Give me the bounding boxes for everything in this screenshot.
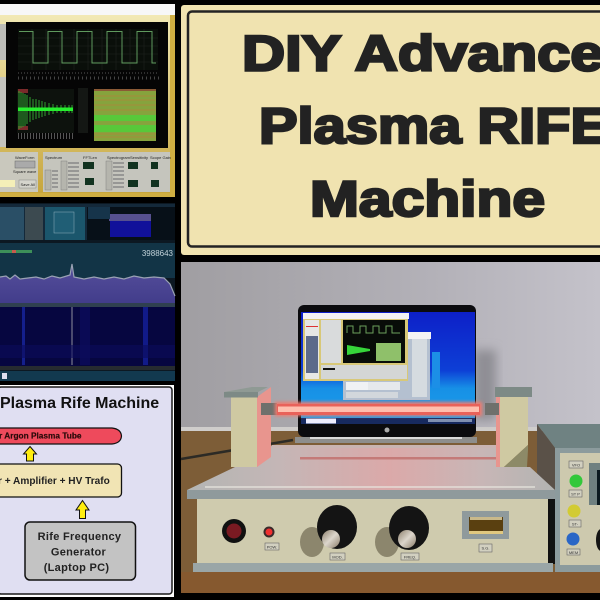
control box labels: ST P: [571, 492, 580, 496]
title text: DIY Advanced: [242, 26, 600, 82]
control panel: FFTLen: [83, 155, 97, 160]
rife frequency generator block: [25, 522, 136, 580]
amplifier block: [0, 464, 122, 497]
chart: square wave oscilloscope: [6, 22, 168, 148]
blue button: [566, 532, 580, 546]
laptop waveform app window: [303, 313, 409, 381]
plasma tube block: r Argon Plasma Tube: [0, 430, 82, 440]
amplifier block: r + Amplifier + HV Trafo: [0, 476, 110, 487]
knob: modulation: [300, 505, 357, 560]
control panel: Save All: [20, 182, 35, 187]
SDR top tool strip: [0, 204, 175, 240]
panel: SDR spectrum screenshot: [0, 203, 175, 381]
analog meter: S.G.: [481, 546, 490, 550]
SDR waterfall: [0, 307, 175, 366]
chart: spectrum decay: [17, 88, 88, 136]
diagram heading: Plasma Rife Machine: [0, 395, 159, 412]
arrow: amplifier to tube: [24, 446, 36, 461]
control panel: Scope Gain: [150, 155, 171, 160]
floor: [181, 431, 600, 593]
power LED: [264, 526, 279, 550]
rife frequency generator block: Generator: [51, 546, 107, 558]
green button: [570, 474, 582, 488]
windows taskbar: [0, 371, 175, 381]
title text: Plasma RIFE: [259, 98, 600, 154]
panel: title: [181, 5, 600, 255]
control panel: WaveForm: [15, 155, 35, 160]
control panel: Sensitivity: [130, 155, 148, 160]
plasma tube: [261, 402, 499, 416]
left tube support post: [224, 387, 271, 467]
control box labels: VFO: [572, 462, 580, 468]
control box labels: ST-: [572, 522, 579, 526]
rife frequency generator block: (Laptop PC): [44, 562, 109, 574]
SDR spectrum trace: [0, 243, 175, 307]
wall: [181, 262, 600, 430]
SDR spectrum trace: 3988643: [142, 249, 174, 258]
rife frequency generator block: Rife Frequency: [38, 531, 122, 543]
front face with controls: [193, 499, 553, 572]
control panel: [0, 152, 171, 192]
control box labels: MEM: [569, 550, 578, 555]
title text: Machine: [310, 171, 545, 227]
power switch: [222, 519, 246, 543]
analog meter: [462, 511, 509, 552]
arrow: generator to amplifier: [76, 500, 89, 518]
right tube support post: [495, 387, 532, 467]
control panel: Spectrogram: [107, 155, 131, 160]
control panel: Spectrum: [45, 155, 63, 160]
control box labels: [567, 461, 583, 555]
plasma tube block: [0, 428, 122, 444]
yellow button: [568, 504, 580, 518]
panel: block diagram: [0, 385, 174, 597]
power LED: POW.: [267, 544, 277, 550]
laptop back window: [343, 332, 431, 400]
control panel: Square wave: [13, 169, 37, 174]
control box: [537, 424, 600, 572]
chart: spectrogram: [94, 89, 156, 141]
table top: [187, 445, 555, 499]
knob: frequency: [375, 506, 429, 560]
title text: [242, 26, 600, 227]
panel: photo of plasma machine: [181, 262, 600, 593]
knob: frequency: FREQ.: [404, 554, 416, 560]
knob: modulation: MOD.: [332, 554, 343, 560]
panel: waveform software screenshot: [0, 4, 175, 197]
laptop: [295, 305, 496, 443]
